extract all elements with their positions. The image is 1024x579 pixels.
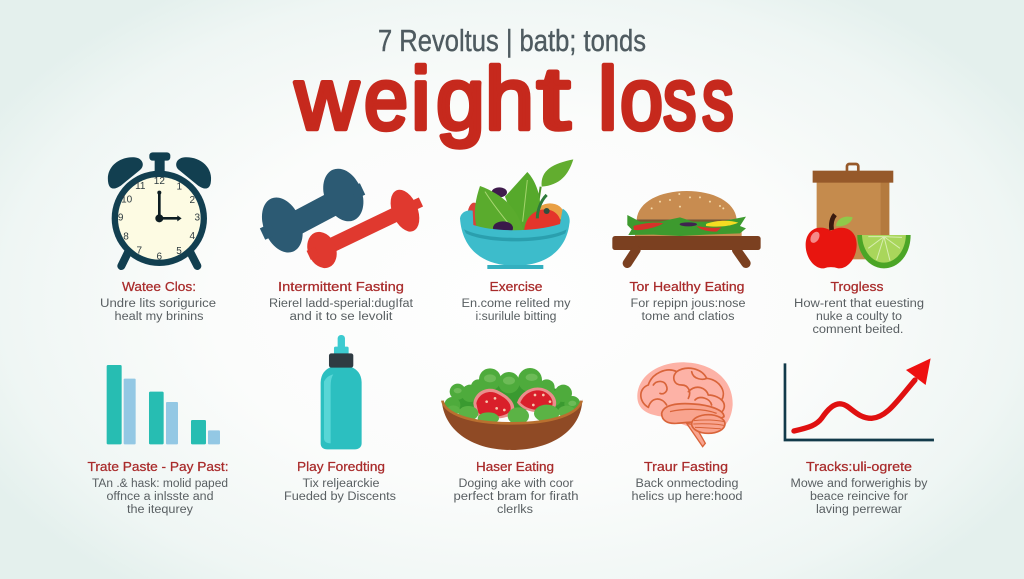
description: progress — [790, 478, 928, 516]
description: berry salad — [454, 478, 578, 516]
description: bar chart: the itequrey — [127, 504, 193, 516]
description: brain — [632, 478, 742, 503]
description: bottle: Fueded by Discents — [284, 491, 396, 503]
description: brain: Back onmectoding — [636, 478, 738, 490]
panel: salad bowl — [460, 159, 573, 323]
description: progress: Mowe and forwerighis by — [790, 478, 928, 490]
subtitle: 7 Revoltus | batb; tonds — [378, 23, 646, 58]
description: burger: For repipn jous:nose — [630, 298, 746, 310]
description: burger — [630, 298, 746, 323]
description: bag: How-rent that euesting — [794, 298, 924, 310]
label: clock heading: Watee Clos: — [122, 279, 196, 294]
label: bar chart heading: Trate Paste - Pay Past: — [88, 459, 228, 474]
label: dumbbells heading: Intermittent Fasting — [278, 279, 404, 294]
icon: alarm clock: 10 — [121, 194, 133, 205]
icon: salad bowl — [460, 159, 573, 269]
title: s — [663, 49, 696, 148]
icon: alarm clock: 11 — [135, 181, 146, 192]
panel: bar chart — [88, 365, 228, 516]
bar chart — [107, 365, 220, 444]
description: bar chart: offnce a inlsste and — [106, 491, 214, 503]
panel: bag and fruit — [794, 164, 924, 336]
description: clock: healt my brinins — [114, 311, 204, 323]
description: berry salad: clerlks — [497, 504, 533, 516]
label: bag heading: Trogless — [830, 279, 884, 294]
icon: alarm clock: 9 — [118, 213, 124, 224]
description: bottle — [284, 478, 396, 503]
icon: berry salad bowl — [442, 368, 582, 450]
description: bag: comnent beited. — [812, 324, 904, 336]
description: bag — [794, 298, 924, 336]
panel: burger — [612, 191, 761, 323]
description: progress: beace reincive for — [810, 491, 908, 503]
description: clock: Undre lits sorigurice — [100, 298, 216, 310]
icon: alarm clock: 2 — [190, 195, 196, 206]
description: salad bowl: i:surilule bitting — [476, 311, 556, 323]
description: dumbbells: and it to se levolit — [290, 311, 393, 323]
title: w — [294, 49, 359, 148]
icon: brain — [637, 362, 733, 447]
title — [294, 49, 734, 149]
panel: water bottle — [284, 335, 396, 503]
description: bar chart: TAn .& hask: molid paped — [92, 478, 228, 490]
description: berry salad: perfect bram for firath — [454, 491, 578, 503]
icon: alarm clock: 12 — [154, 176, 165, 187]
description: bottle: Tix reljearckie — [302, 478, 380, 490]
icon: dumbbells — [254, 163, 425, 273]
panel: dumbbells — [254, 163, 425, 323]
title: t — [537, 50, 570, 148]
description: salad bowl: En.come relited my — [462, 298, 571, 310]
description: clock — [100, 298, 216, 323]
label: brain heading: Traur Fasting — [644, 459, 728, 474]
icon: alarm clock: 3 — [195, 213, 201, 224]
description: salad bowl — [462, 298, 571, 323]
icon: alarm clock: 7 — [137, 246, 143, 257]
description: dumbbells: Rierel ladd-sperial:dugIfat — [269, 298, 414, 310]
icon: water bottle — [321, 335, 362, 449]
title: l — [598, 49, 618, 148]
description: dumbbells — [269, 298, 414, 323]
label: progress heading: Tracks:uli-ogrete — [806, 459, 912, 474]
line chart with arrow — [785, 358, 934, 440]
icon: alarm clock: 5 — [176, 246, 182, 257]
panel: clock — [100, 152, 216, 323]
panel: progress chart — [785, 358, 934, 516]
icon: alarm clock: 4 — [190, 231, 196, 242]
title: o — [620, 49, 663, 148]
icon: paper bag with apple and lime — [806, 164, 911, 268]
icon: alarm clock: 8 — [123, 232, 129, 243]
title: s — [702, 51, 734, 149]
description: bag: nuke a coulty to — [816, 311, 902, 323]
description: bar chart — [92, 478, 228, 516]
title: igh — [411, 49, 534, 148]
title: e — [364, 49, 408, 148]
label: bottle heading: Play Foredting — [297, 459, 385, 474]
label: berry salad heading: Haser Eating — [476, 459, 554, 474]
label: burger heading: Tor Healthy Eating — [630, 279, 744, 294]
icon: alarm clock — [108, 152, 211, 266]
description: brain: helics up here:hood — [632, 491, 742, 503]
description: berry salad: Doging ake with coor — [458, 478, 574, 490]
description: progress: laving perrewar — [816, 504, 902, 516]
label: salad bowl heading: Exercise — [490, 279, 542, 294]
panel: berry salad — [442, 368, 582, 516]
panel: brain — [632, 362, 742, 503]
icon: burger on table — [612, 191, 761, 263]
description: burger: tome and clatios — [642, 311, 735, 323]
icon: alarm clock: 1 — [177, 182, 183, 193]
icon: alarm clock: 6 — [157, 252, 163, 263]
